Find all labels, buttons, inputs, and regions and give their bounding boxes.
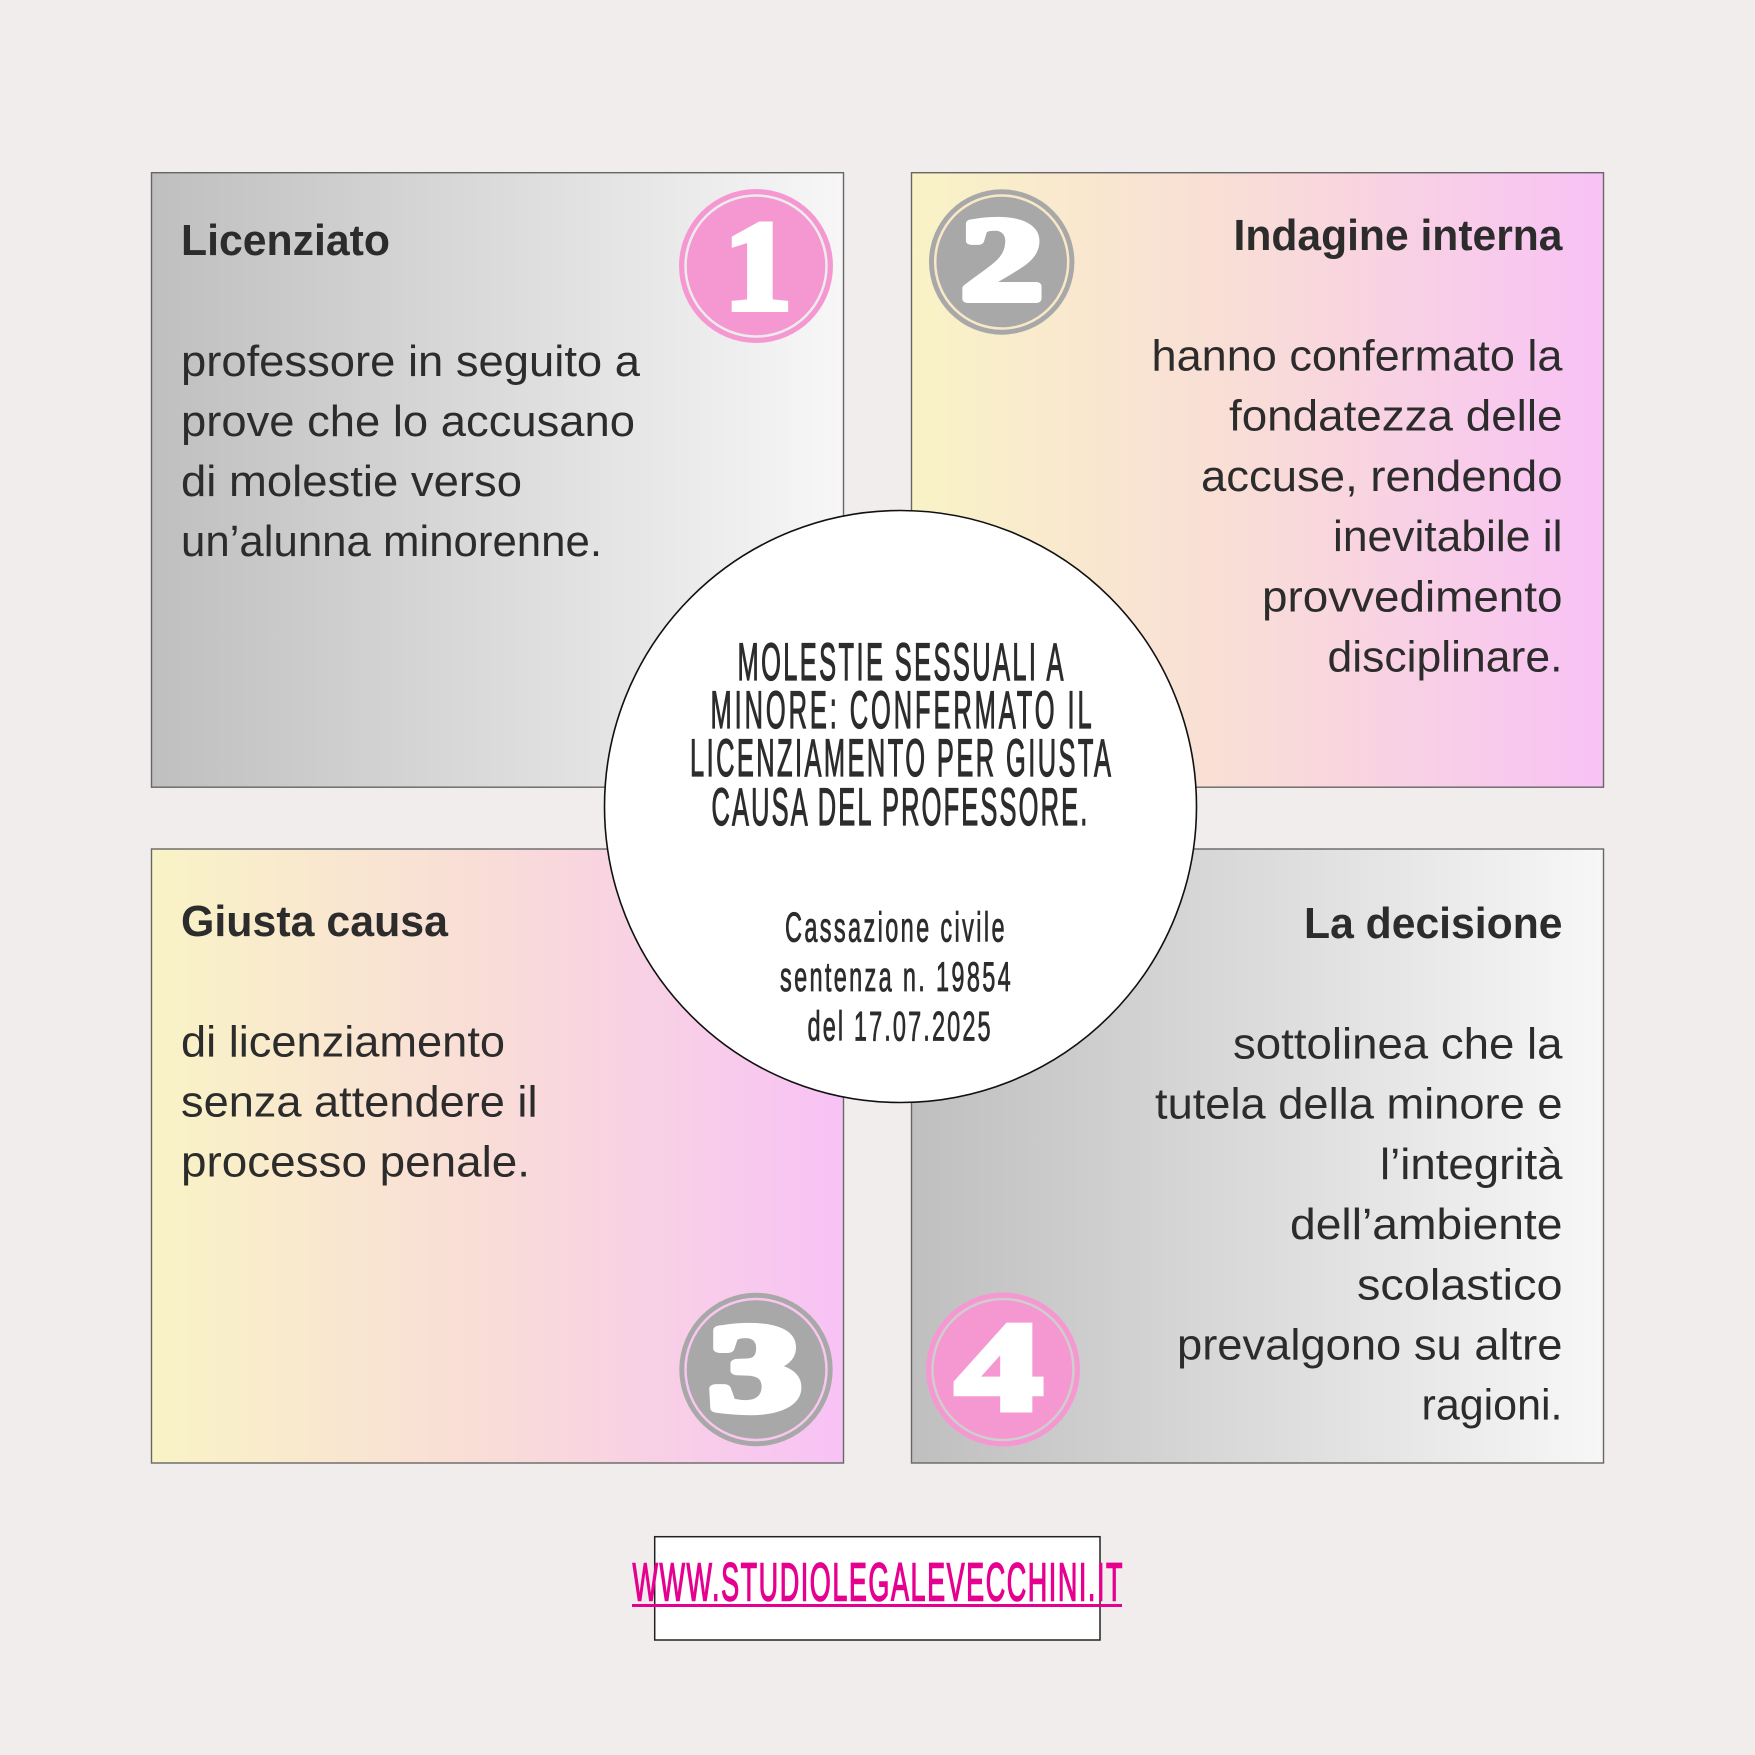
- body text panel 4: tutela della minore e: [1155, 1080, 1562, 1129]
- citation: del 17.07.2025: [808, 1003, 991, 1050]
- body text panel 2: disciplinare.: [1328, 632, 1562, 682]
- citation: [780, 905, 1011, 1050]
- body text panel 2: accuse, rendendo: [1201, 452, 1562, 501]
- heading: Giusta causa: Giusta causa: [181, 897, 449, 946]
- central circle: [604, 510, 1196, 1102]
- body text panel 2: fondatezza delle: [1229, 392, 1562, 441]
- badge 4: [926, 1292, 1080, 1446]
- body text panel 2: provvedimento: [1262, 572, 1562, 621]
- title: [690, 632, 1111, 836]
- body text panel 1: professore in seguito a: [181, 337, 641, 386]
- body text panel 3: [181, 1018, 538, 1186]
- panel 3: Giusta causa: [152, 849, 844, 1463]
- badge 1: [679, 189, 833, 343]
- footer website link: [632, 1537, 1122, 1640]
- body text panel 1: un’alunna minorenne.: [181, 517, 602, 566]
- body text panel 4: l’integrità: [1380, 1140, 1563, 1189]
- body text panel 4: dell’ambiente: [1290, 1200, 1562, 1249]
- body text panel 3: senza attendere il: [181, 1078, 538, 1126]
- badge 2: 2: [961, 194, 1043, 325]
- badge 2: [929, 189, 1074, 335]
- body text panel 2: [1152, 332, 1563, 682]
- badge 4: 4: [956, 1298, 1042, 1437]
- body text panel 1: di molestie verso: [181, 457, 522, 506]
- title: CAUSA DEL PROFESSORE.: [712, 777, 1087, 836]
- body text panel 2: inevitabile il: [1333, 512, 1562, 561]
- body text panel 4: [1155, 1020, 1563, 1430]
- citation: sentenza n. 19854: [780, 954, 1011, 1001]
- badge 1: 1: [724, 195, 792, 337]
- heading: Licenziato: Licenziato: [181, 216, 390, 265]
- body text panel 4: sottolinea che la: [1233, 1020, 1563, 1068]
- body text panel 4: scolastico: [1357, 1260, 1562, 1309]
- body text panel 4: ragioni.: [1422, 1381, 1562, 1430]
- footer website link: WWW.STUDIOLEGALEVECCHINI.IT: [632, 1553, 1123, 1613]
- body text panel 3: di licenziamento: [181, 1018, 505, 1066]
- heading: Indagine interna: Indagine interna: [1234, 211, 1563, 260]
- body text panel 1: prove che lo accusano: [181, 397, 635, 446]
- heading: La decisione: La decisione: [1304, 899, 1562, 948]
- body text panel 3: processo penale.: [181, 1138, 530, 1186]
- title: LICENZIAMENTO PER GIUSTA: [690, 728, 1111, 787]
- panel 1: Licenziato: [152, 173, 844, 787]
- body text panel 2: hanno confermato la: [1152, 332, 1563, 380]
- citation: Cassazione civile: [785, 905, 1005, 952]
- badge 3: [679, 1293, 833, 1446]
- body text panel 1: [181, 337, 641, 566]
- panel 4: La decisione: [912, 849, 1604, 1463]
- title: MOLESTIE SESSUALI A: [738, 632, 1064, 691]
- panel 2: Indagine interna: [912, 173, 1604, 787]
- body text panel 4: prevalgono su altre: [1177, 1320, 1562, 1370]
- title: MINORE: CONFERMATO IL: [710, 680, 1092, 739]
- badge 3: 3: [709, 1300, 801, 1436]
